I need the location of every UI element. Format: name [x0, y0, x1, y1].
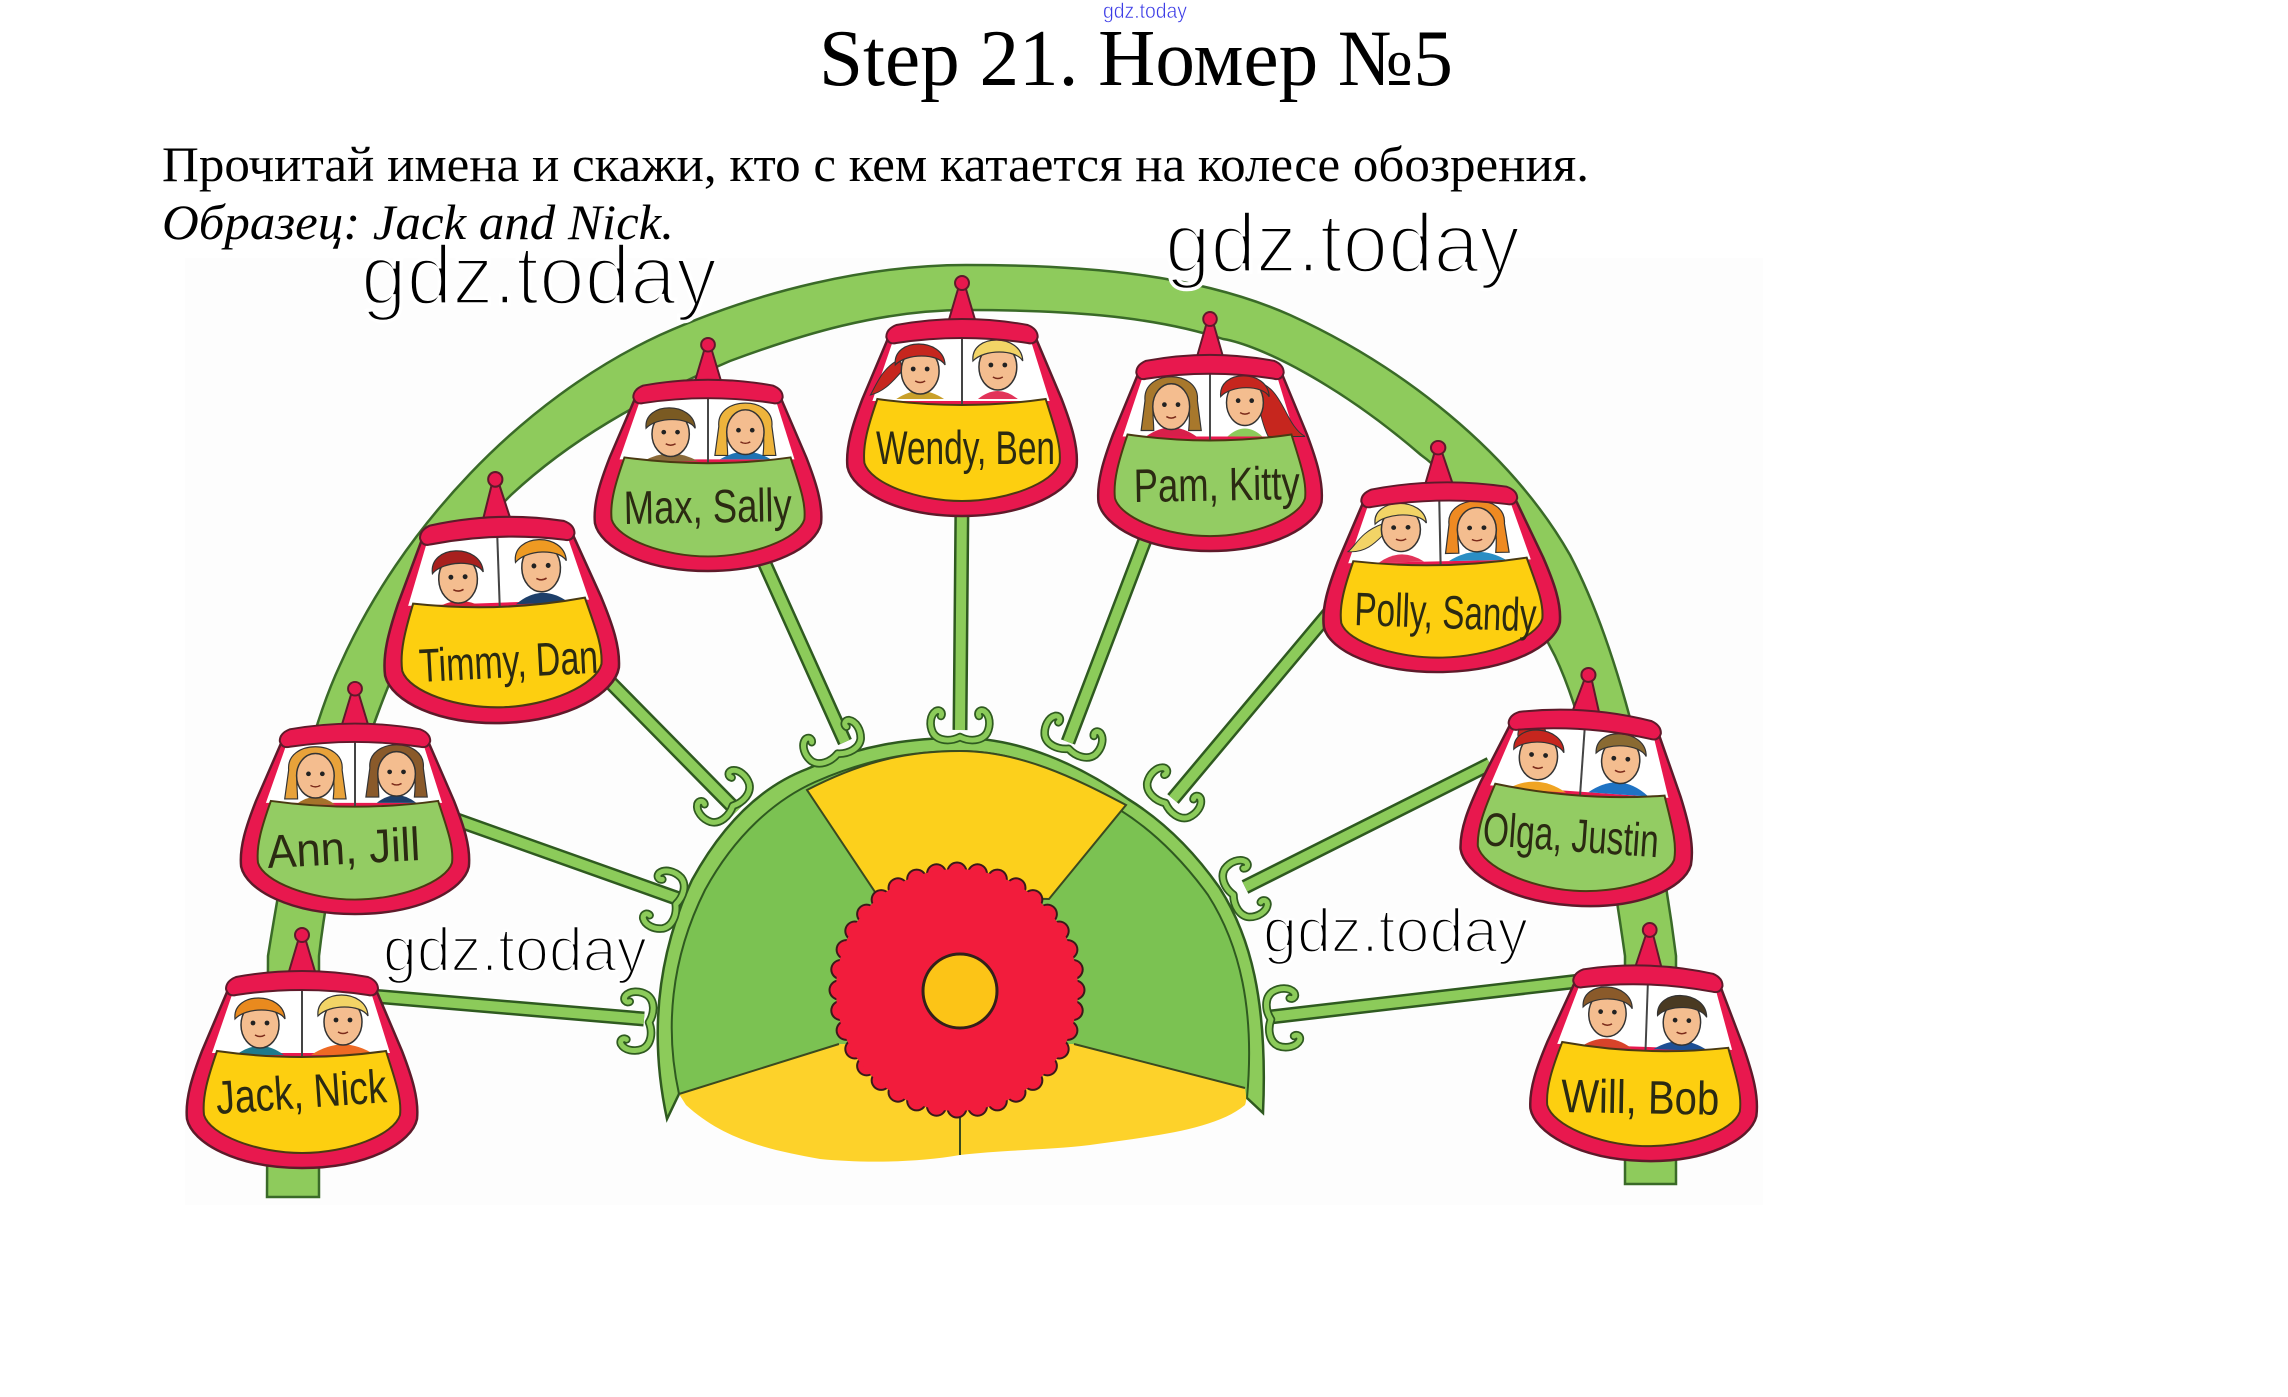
- cabin: Timmy, Dan: [378, 468, 621, 727]
- cabin: Max, Sally: Max, Sally: [623, 478, 793, 534]
- watermark top left: gdz.today: [361, 228, 717, 322]
- cabin: Jack, Nick: [187, 928, 417, 1168]
- cabin: Polly, Sandy: Polly, Sandy: [1354, 582, 1538, 641]
- watermark middle right: gdz.today: [1263, 897, 1528, 966]
- hub bottom yellow sector: [679, 1044, 1246, 1162]
- cabin: Max, Sally: [595, 338, 821, 571]
- hub green background: [672, 751, 1249, 1100]
- cabin: Will, Bob: Will, Bob: [1561, 1069, 1720, 1125]
- watermark small blue: gdz.today: [1103, 0, 1187, 23]
- cabin: Will, Bob: [1528, 919, 1763, 1165]
- cabin: Ann, Jill: Ann, Jill: [266, 817, 421, 878]
- spokes: [360, 500, 1580, 1019]
- cabin: Ann, Jill: [241, 682, 469, 914]
- example text: Образец: Jack and Nick.: [162, 194, 674, 250]
- cabin: Olga, Justin: [1457, 660, 1704, 914]
- cabin: Jack, Nick: Jack, Nick: [214, 1059, 389, 1124]
- watermark middle left: gdz.today: [383, 916, 647, 985]
- cabin: Pam, Kitty: [1098, 312, 1322, 551]
- cabin: Timmy, Dan: Timmy, Dan: [418, 630, 599, 692]
- picture background: [185, 258, 1763, 1205]
- spoke ornaments: [620, 710, 1301, 1052]
- hub of the wheel: [658, 738, 1264, 1162]
- cabin: Olga, Justin: Olga, Justin: [1481, 802, 1661, 867]
- hub top yellow sector: [807, 751, 1126, 899]
- title: Step 21. Номер №5: [819, 15, 1453, 103]
- cabin: Wendy, Ben: Wendy, Ben: [876, 421, 1055, 474]
- cabin: Polly, Sandy: [1320, 438, 1561, 675]
- ferris wheel outer rim: [267, 265, 1676, 1197]
- cabin: Pam, Kitty: Pam, Kitty: [1133, 456, 1301, 512]
- cabin: Wendy, Ben: [847, 276, 1077, 516]
- hub rim: [658, 738, 1264, 1119]
- yellow hole: [923, 954, 997, 1028]
- instruction text: Прочитай имена и скажи, кто с кем катается на колесе обозрения.: [162, 136, 1589, 192]
- red scalloped centre: [836, 869, 1078, 1111]
- watermark top right: gdz.today: [1165, 196, 1520, 290]
